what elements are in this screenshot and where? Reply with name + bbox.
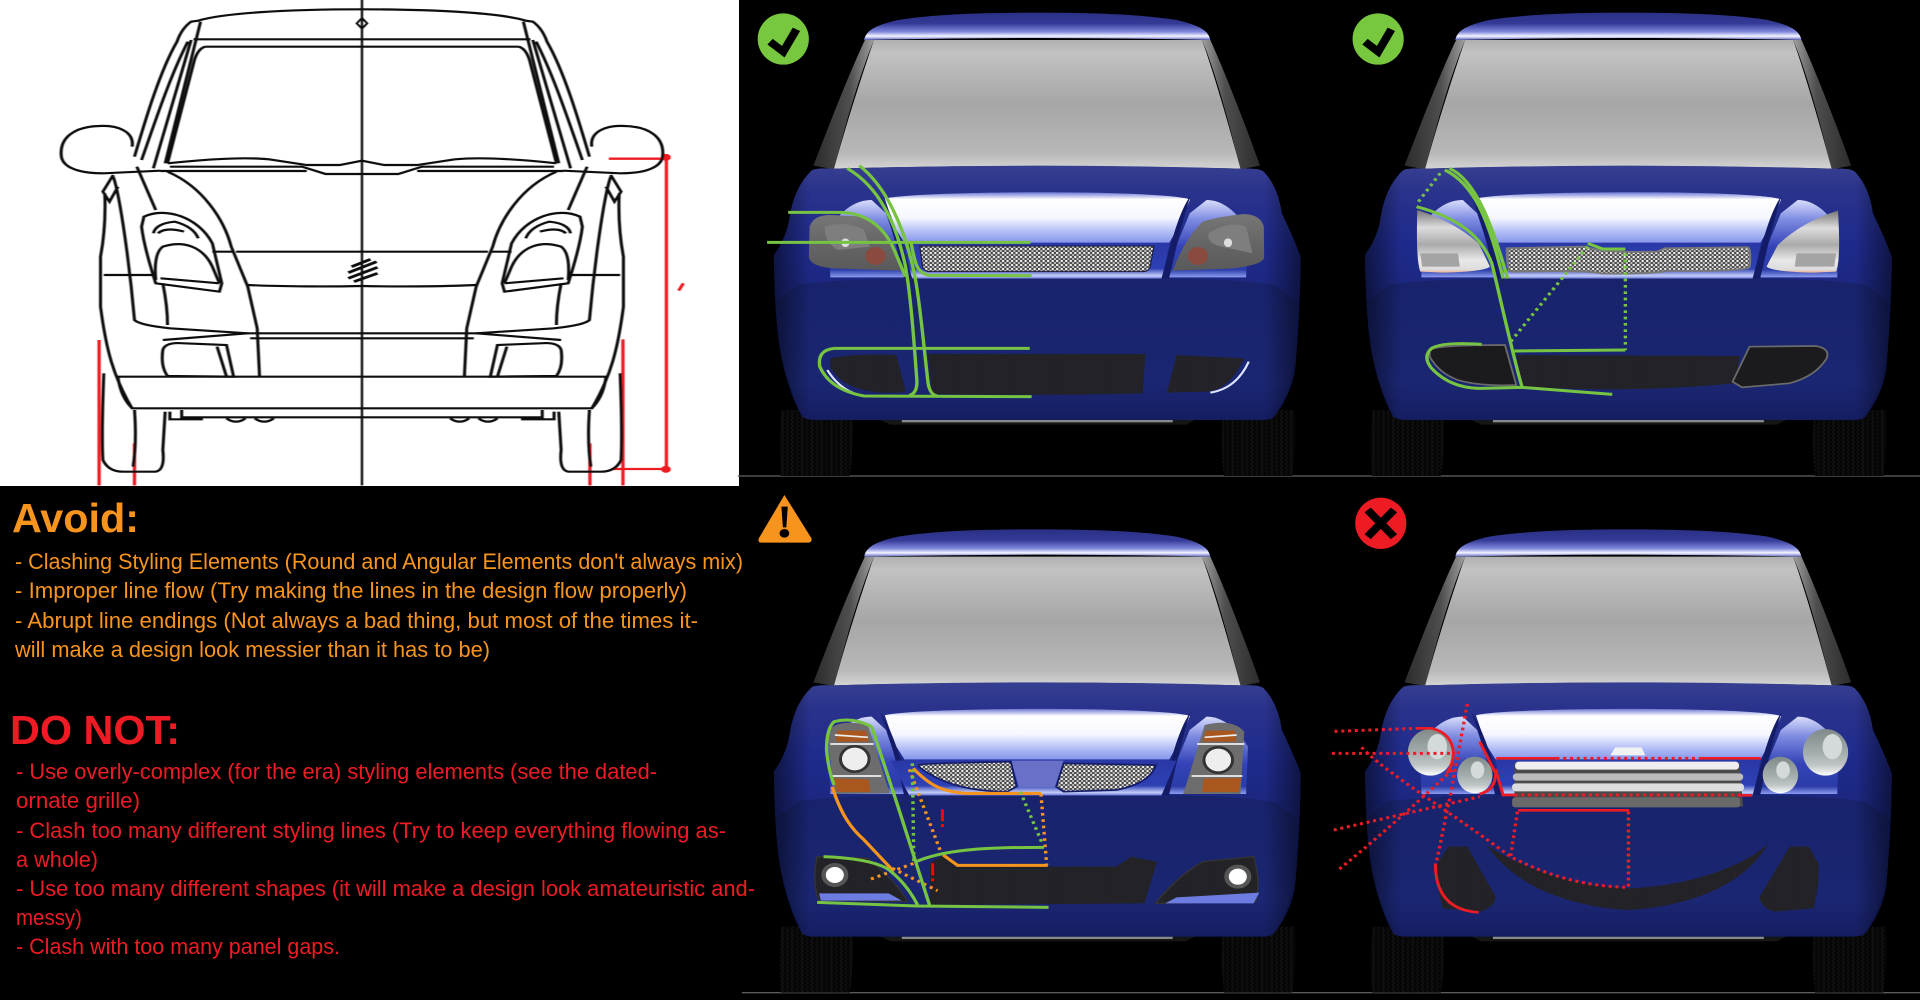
dotted orange guides: [871, 769, 1047, 891]
green styling lines: [767, 166, 1032, 397]
text block: Avoid list: - Improper line flow (Try making the lines in the design flow properly): [15, 578, 687, 603]
text block: Avoid list: - Abrupt line endings (Not always a bad thing, but most of the times it-: [15, 608, 698, 633]
grille mesh: [1507, 247, 1750, 273]
solid green lines: [817, 720, 1049, 907]
text block: DO NOT list: - Clash too many different styling lines (Try to keep everything flowing as-: [16, 818, 726, 843]
text block: DO NOT list: [16, 759, 755, 959]
panel: good design B: [1330, 13, 1920, 477]
round headlamps: [1408, 729, 1848, 793]
slatted grille: [1512, 762, 1744, 807]
band between grilles: [891, 761, 1176, 795]
text block: DO NOT list: - Use too many different shapes (it will make a design look amateuristic and-: [16, 876, 755, 901]
text block: Avoid list: - Clashing Styling Elements (Round and Angular Elements don't always mix): [15, 549, 743, 574]
red exclamation marks: [931, 809, 944, 881]
split grille: [919, 761, 1156, 792]
icon: check mark: [1353, 13, 1404, 65]
car outline, left half: [61, 9, 362, 472]
icon: badge: [348, 259, 378, 282]
grille mesh: [920, 246, 1154, 272]
icon: red cross: [1355, 498, 1406, 549]
heading: Avoid: Avoid:: [12, 495, 139, 541]
dotted red guide lines: [1332, 704, 1742, 887]
lower intakes: [1430, 345, 1827, 389]
lower intake: [930, 855, 1157, 905]
text block: DO NOT list: - Use overly-complex (for the era) styling elements (see the dated-: [16, 759, 657, 784]
dotted green guide lines: [1418, 171, 1625, 350]
text block: Avoid list: [14, 549, 743, 662]
icon: check mark: [758, 13, 809, 65]
text block: DO NOT list: - Clash with too many panel gaps.: [16, 934, 340, 959]
red dimension lines: [99, 155, 683, 485]
lower intakes: [830, 354, 1244, 395]
text block: Avoid list: will make a design look messier than it has to be): [14, 637, 490, 662]
headlights: [809, 214, 1264, 271]
text block: DO NOT list: messy): [16, 905, 82, 930]
solid red lines: [1418, 728, 1761, 912]
dotted green guides: [912, 763, 1043, 862]
panel: bad design: [1330, 498, 1920, 993]
text block: DO NOT list: a whole): [16, 847, 98, 872]
icon: warning triangle: [758, 495, 812, 543]
text block: DO NOT list: ornate grille): [16, 788, 140, 813]
green styling lines: [1417, 168, 1625, 394]
panel: reference line drawing of car front: [0, 0, 739, 486]
panel: caution design: [742, 495, 1330, 993]
headlights: [1417, 210, 1839, 273]
fog lamps: [815, 857, 1259, 903]
lower intakes: [1437, 843, 1818, 912]
mirrored right half: [362, 9, 663, 472]
panel: good design A: [738, 13, 1330, 477]
solid orange lines: [832, 768, 1048, 870]
headlights: [827, 723, 1244, 794]
heading: DO NOT: DO NOT:: [10, 707, 180, 753]
hood ornament: [1610, 747, 1645, 755]
centre line: [357, 0, 367, 485]
